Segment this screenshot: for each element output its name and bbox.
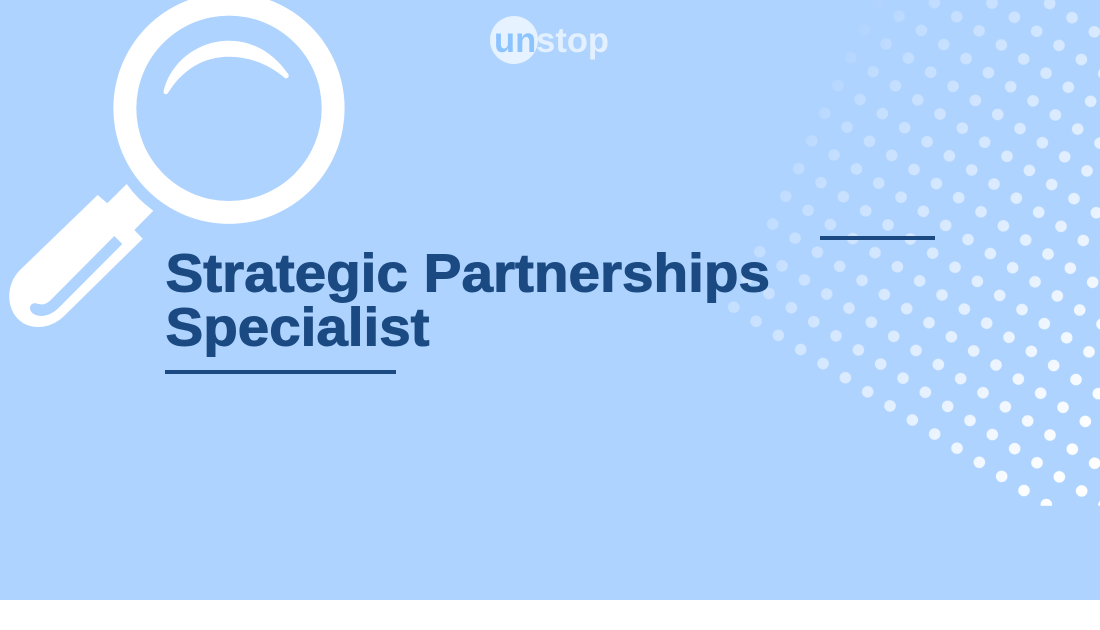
title: Strategic Partnerships [166,244,770,304]
title: Specialist [166,298,430,358]
icon: magnifying glass [9,0,345,327]
title underline [165,370,396,374]
logo: unstop: unstop [494,21,609,60]
accent line: top right [820,236,935,240]
dot pattern [720,0,1100,506]
title [166,244,770,358]
